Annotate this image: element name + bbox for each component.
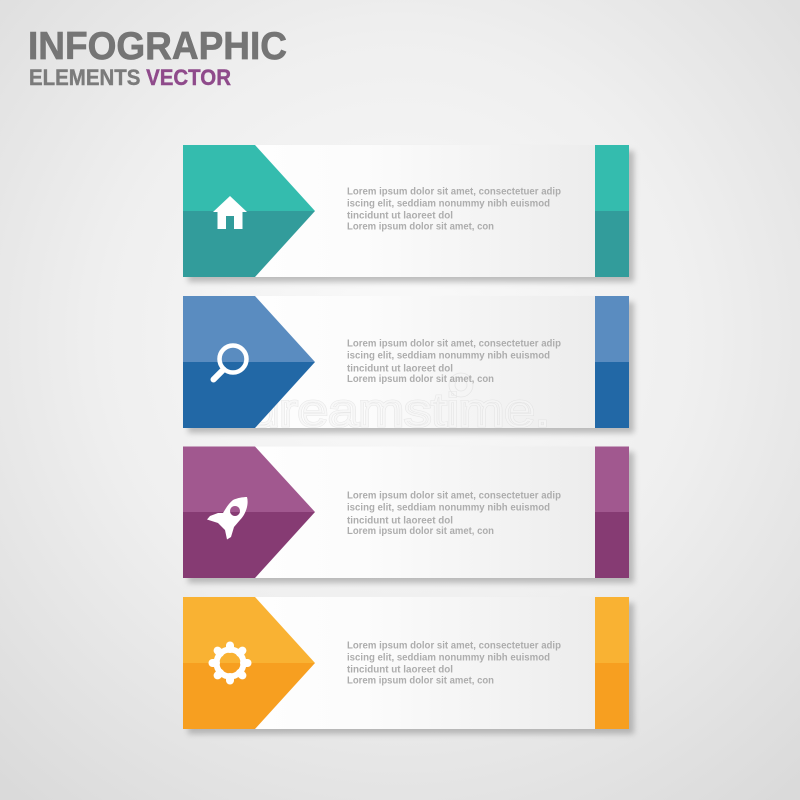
- text block: Lorem ipsum dolor sit amet, con: [347, 222, 494, 232]
- text block: Lorem ipsum dolor sit amet, consectetuer adip: [347, 640, 561, 652]
- panel: orange gear: [183, 597, 634, 734]
- text block: [347, 186, 561, 232]
- icon: house: [213, 196, 247, 229]
- panel: teal home: [183, 145, 634, 282]
- text block: tincidunt ut laoreet dol: [347, 664, 453, 676]
- side bar: purple: [595, 446, 629, 578]
- arrow: purple: [183, 446, 315, 578]
- panel: blue search: [183, 296, 634, 436]
- subtitle: ELEMENTS VECTOR: [29, 65, 231, 90]
- text block: [347, 490, 561, 537]
- arrow: blue: [183, 296, 315, 428]
- text block: iscing elit, seddiam nonummy nibh euismod: [347, 198, 550, 210]
- text block: Lorem ipsum dolor sit amet, consectetuer adip: [347, 186, 561, 198]
- side bar: orange: [595, 597, 629, 729]
- side bar: teal: [595, 145, 629, 277]
- text block: Lorem ipsum dolor sit amet, consectetuer adip: [347, 338, 561, 350]
- text block: Lorem ipsum dolor sit amet, con: [347, 676, 494, 686]
- text block: tincidunt ut laoreet dol: [347, 210, 453, 222]
- title: [28, 25, 287, 90]
- icon: gear: [212, 646, 248, 680]
- text block: Lorem ipsum dolor sit amet, con: [347, 526, 494, 537]
- text block: Lorem ipsum dolor sit amet, con: [347, 374, 494, 385]
- text block: iscing elit, seddiam nonummy nibh euismod: [347, 350, 550, 362]
- arrow: orange: [183, 597, 315, 729]
- text block: iscing elit, seddiam nonummy nibh euismod: [347, 502, 550, 514]
- icon: magnifier: [214, 346, 246, 380]
- icon: rocket: [207, 497, 248, 540]
- panel: purple rocket: [183, 446, 634, 583]
- text block: iscing elit, seddiam nonummy nibh euismod: [347, 652, 550, 664]
- text block: tincidunt ut laoreet dol: [347, 516, 453, 526]
- text block: [347, 640, 561, 686]
- watermark: dreamstime.: [249, 384, 550, 436]
- watermark: [249, 373, 550, 436]
- text block: [347, 338, 561, 385]
- side bar: blue: [595, 296, 629, 428]
- arrow: teal: [183, 145, 315, 277]
- text block: tincidunt ut laoreet dol: [347, 364, 453, 374]
- text block: Lorem ipsum dolor sit amet, consectetuer adip: [347, 490, 561, 502]
- title: INFOGRAPHIC: [28, 25, 287, 68]
- watermark: dreamstime.: [249, 384, 550, 436]
